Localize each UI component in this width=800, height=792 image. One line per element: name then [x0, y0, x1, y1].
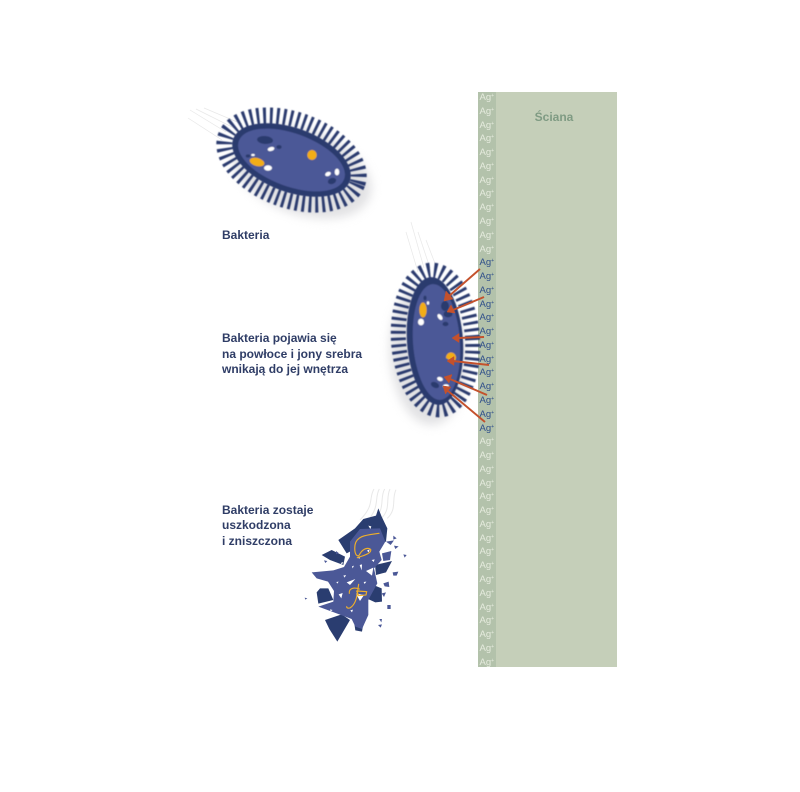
arrow 1 — [444, 269, 480, 301]
silver ion coating labels: Ag — [480, 409, 491, 420]
silver ion coating labels: Ag — [480, 175, 491, 186]
silver ion coating labels: Ag — [480, 354, 491, 365]
bacterium 3: destroyed fragments — [305, 489, 407, 642]
silver ion coating labels: + — [491, 107, 494, 113]
silver ion coating labels: + — [491, 93, 494, 99]
label: bacterium destroyed: uszkodzona — [222, 518, 291, 532]
arrow 6 — [443, 386, 485, 422]
silver ion coating labels: Ag — [480, 602, 491, 613]
bacterium 1: intact — [188, 98, 384, 236]
silver ion coating labels: Ag — [480, 257, 491, 268]
label: bacterium on coating: Bakteria pojawia się — [222, 331, 337, 345]
silver ion coating labels: + — [491, 410, 494, 416]
silver ion coating labels: Ag — [480, 299, 491, 310]
silver ion coating labels: + — [491, 534, 494, 540]
silver ion coating labels: + — [491, 368, 494, 374]
silver ion coating labels: + — [491, 492, 494, 498]
silver ion coating labels: Ag — [480, 202, 491, 213]
silver ion coating labels: + — [491, 547, 494, 553]
silver ion coating labels: + — [491, 451, 494, 457]
silver ion coating labels: + — [491, 272, 494, 278]
silver ion coating labels: Ag — [480, 161, 491, 172]
silver ion coating labels: Ag — [480, 340, 491, 351]
silver ion coating labels: + — [491, 231, 494, 237]
silver ion coating labels: Ag — [480, 560, 491, 571]
arrow 2 — [447, 297, 484, 313]
silver ion coating labels: Ag — [480, 271, 491, 282]
silver ion coating labels: Ag — [480, 120, 491, 131]
silver ion coating labels: Ag — [480, 464, 491, 475]
silver ion coating labels: + — [491, 603, 494, 609]
silver ion coating labels: Ag — [480, 216, 491, 227]
silver ion coating labels: + — [491, 644, 494, 650]
label: bacterium on coating: wnikają do jej wnętrza — [221, 362, 348, 376]
silver ion coating labels: + — [491, 396, 494, 402]
silver ion coating labels: + — [491, 424, 494, 430]
wall panel — [478, 92, 617, 667]
silver ion coating labels: + — [491, 465, 494, 471]
silver ion coating labels: Ag — [480, 436, 491, 447]
silver ion coating labels: Ag — [480, 574, 491, 585]
silver ion coating labels: + — [491, 658, 494, 664]
silver ion coating labels: + — [491, 616, 494, 622]
silver ion coating labels: Ag — [480, 450, 491, 461]
silver ion coating labels: + — [491, 561, 494, 567]
label: bacterium destroyed: i zniszczona — [222, 534, 292, 548]
silver ion coating labels: + — [491, 479, 494, 485]
arrow 4 — [447, 356, 489, 366]
silver ion coating labels: Ag — [480, 133, 491, 144]
silver ion coating labels: Ag — [480, 188, 491, 199]
silver ion coating labels: + — [491, 189, 494, 195]
silver ion coating labels: Ag — [480, 106, 491, 117]
silver ion coating labels: Ag — [480, 491, 491, 502]
genetic material strands — [347, 533, 379, 608]
silver ion coating labels: Ag — [480, 230, 491, 241]
silver ion coating labels: Ag — [480, 657, 491, 668]
silver ion coating labels: Ag — [480, 312, 491, 323]
silver ion coating labels: Ag — [480, 505, 491, 516]
silver ion coating labels: Ag — [480, 285, 491, 296]
silver ion coating labels: + — [491, 245, 494, 251]
silver ion coating labels: Ag — [480, 367, 491, 378]
label: bacterium on coating: na powłoce i jony srebra — [222, 347, 362, 361]
arrows: silver ions entering the bacterium — [443, 269, 489, 422]
silver ion coating labels: Ag — [480, 588, 491, 599]
silver ion coating labels: Ag — [480, 326, 491, 337]
silver ion coating labels: + — [491, 437, 494, 443]
silver ion coating labels: Ag — [480, 381, 491, 392]
label: Bakteria: Bakteria — [222, 228, 270, 242]
silver ion coating labels: + — [491, 148, 494, 154]
silver ion coating labels: Ag — [480, 629, 491, 640]
silver ion coating labels: + — [491, 327, 494, 333]
silver ion coating labels: Ag — [480, 92, 491, 103]
silver ion coating labels — [480, 92, 494, 668]
silver ion coating labels: Ag — [480, 546, 491, 557]
silver ion coating labels: + — [491, 176, 494, 182]
silver ion coating labels: Ag — [480, 244, 491, 255]
silver ion coating labels: + — [491, 217, 494, 223]
silver ion coating labels: Ag — [480, 643, 491, 654]
wall label: Ściana — [535, 109, 574, 124]
silver ion coating labels: + — [491, 203, 494, 209]
silver ion coating labels: + — [491, 134, 494, 140]
silver ion coating labels: + — [491, 121, 494, 127]
silver ion coating labels: + — [491, 630, 494, 636]
silver ion coating labels: + — [491, 341, 494, 347]
silver ion coating labels: + — [491, 520, 494, 526]
silver ion coating labels: + — [491, 286, 494, 292]
arrow 3 — [452, 334, 484, 342]
silver ion coating labels: + — [491, 300, 494, 306]
silver ion coating labels: + — [491, 313, 494, 319]
label: bacterium destroyed: Bakteria zostaje — [222, 503, 314, 517]
silver ion coating labels: Ag — [480, 395, 491, 406]
silver ion coating labels: Ag — [480, 478, 491, 489]
silver ion coating labels: + — [491, 589, 494, 595]
silver ion coating labels: Ag — [480, 423, 491, 434]
silver ion coating labels: + — [491, 575, 494, 581]
silver ion coating labels: Ag — [480, 615, 491, 626]
silver ion coating labels: + — [491, 258, 494, 264]
bacterium 2: on the coating — [385, 222, 477, 427]
arrow 5 — [444, 374, 487, 395]
silver ion coating labels: + — [491, 355, 494, 361]
silver ion coating labels: + — [491, 162, 494, 168]
silver ion coating labels: + — [491, 382, 494, 388]
silver ion coating labels: + — [491, 506, 494, 512]
silver ion coating labels: Ag — [480, 519, 491, 530]
silver ion coating labels: Ag — [480, 147, 491, 158]
silver ion coating labels: Ag — [480, 533, 491, 544]
